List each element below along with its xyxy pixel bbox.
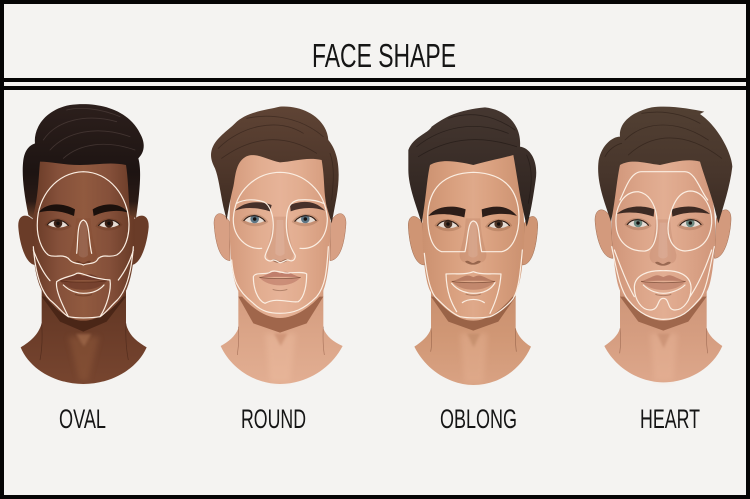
eyebrows <box>38 204 128 216</box>
nose <box>650 219 676 266</box>
neck and shoulders <box>604 287 722 382</box>
eyes <box>624 218 704 230</box>
face <box>612 140 715 321</box>
neck shading <box>620 297 708 381</box>
label: oblong: OBLONG <box>440 404 517 434</box>
eyebrows <box>617 207 710 217</box>
hair strands <box>43 108 135 158</box>
hair strands <box>417 115 531 203</box>
nose <box>267 217 293 263</box>
face shape contour lines <box>33 172 133 318</box>
neck and shoulders <box>414 287 531 385</box>
panel: round face <box>211 107 346 384</box>
neck shading <box>237 297 324 382</box>
hair <box>598 107 732 223</box>
panel: oblong face <box>408 107 538 385</box>
face <box>422 140 524 321</box>
mouth <box>641 275 686 296</box>
face <box>230 140 330 318</box>
nose <box>460 218 486 265</box>
title double rule <box>4 78 746 90</box>
neck shading <box>40 297 128 381</box>
eyebrows <box>235 202 325 211</box>
panel: heart face <box>595 107 732 382</box>
mouth <box>452 275 495 295</box>
hair <box>23 104 144 218</box>
face shape contour lines <box>612 172 714 319</box>
label: heart: HEART <box>640 404 700 434</box>
neck and shoulders <box>21 287 147 384</box>
label: round: ROUND <box>241 404 306 434</box>
ears <box>18 216 149 265</box>
face <box>32 140 135 321</box>
face shape contour lines <box>232 172 328 313</box>
hair <box>408 107 536 227</box>
eyes <box>241 214 319 226</box>
neck shading <box>431 297 516 383</box>
mouth <box>60 274 107 296</box>
eyes <box>434 219 512 231</box>
eyebrows <box>428 207 517 217</box>
ears <box>595 210 731 258</box>
neck and shoulders <box>221 287 343 384</box>
title: FACE SHAPE <box>312 38 456 75</box>
mouth <box>259 272 301 291</box>
eyes <box>44 218 123 231</box>
nose <box>70 218 97 265</box>
hair <box>211 107 339 223</box>
ears <box>214 214 346 261</box>
hair strands <box>605 112 722 158</box>
panel: oval face <box>18 104 149 384</box>
face shape contour lines <box>424 172 522 318</box>
ears <box>408 216 538 265</box>
hair strands <box>218 116 333 200</box>
label: oval: OVAL <box>59 404 106 434</box>
